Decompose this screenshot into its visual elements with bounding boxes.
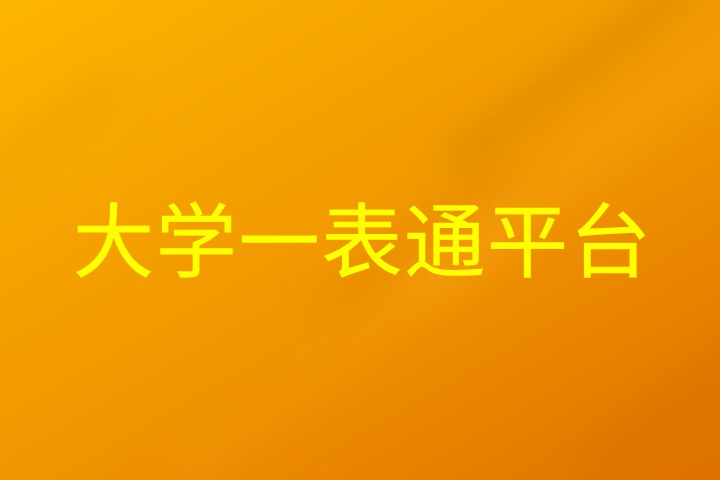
title: 大学一表通平台 (73, 199, 653, 289)
